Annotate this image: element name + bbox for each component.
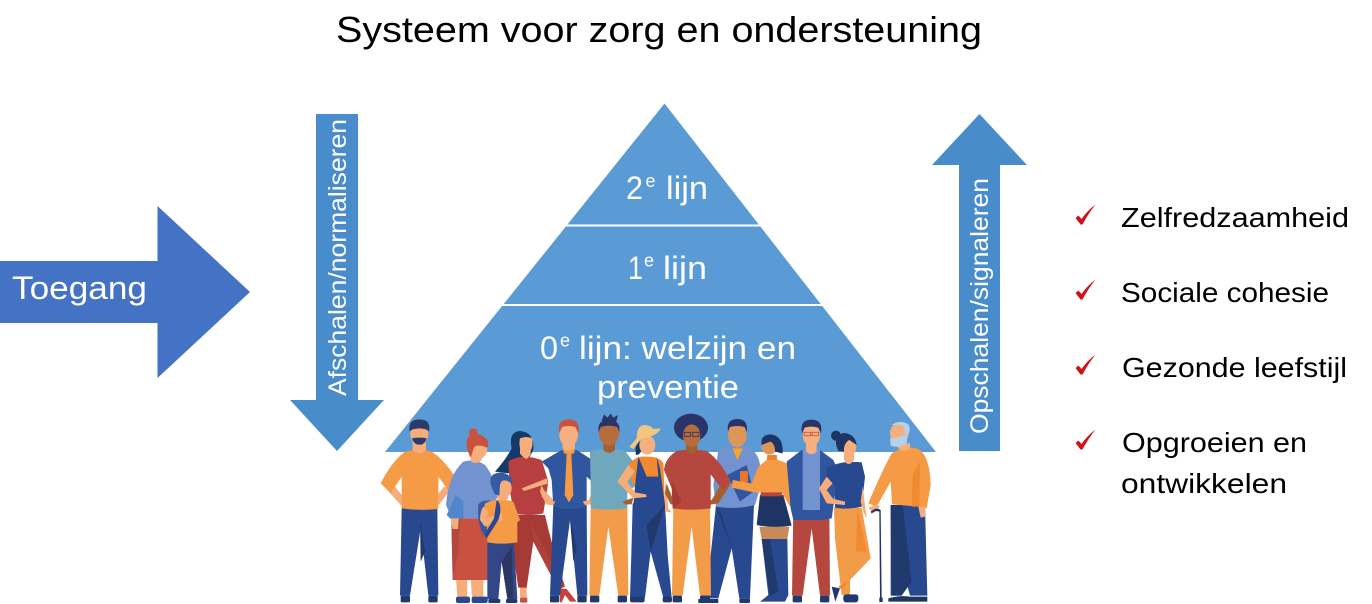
person: woman in overalls and straw hat: [617, 425, 672, 602]
tier label: 2e lijn: [626, 170, 708, 206]
item: Opgroeien en ontwikkelen: ontwikkelen: [1121, 468, 1287, 499]
item: Sociale cohesie: Sociale cohesie: [1121, 277, 1329, 308]
title: Systeem voor zorg en ondersteuning: [336, 9, 982, 50]
tier label: 1e lijn: 1: [628, 250, 643, 286]
person: man with afro in red sweater: [664, 414, 731, 602]
arrow: Opschalen/signaleren: Opschalen/signaleren: [966, 178, 994, 434]
item: Opgroeien en ontwikkelen: Opgroeien en: [1122, 427, 1307, 458]
checklist: [1076, 202, 1349, 499]
person: man in blue shirt and tie: [540, 419, 609, 602]
tier label: 2e lijn: 2: [626, 170, 643, 206]
person: man in teal shirt: [589, 414, 637, 602]
person: woman with dark hair in red top: [495, 431, 577, 603]
tier label: 1e lijn: lijn: [663, 250, 707, 286]
person: child with backpack: [478, 473, 520, 603]
item: Opgroeien en ontwikkelen: [1076, 427, 1307, 499]
arrow: Opschalen/signaleren: [932, 114, 1027, 451]
item: Zelfredzaamheid: Zelfredzaamheid: [1121, 202, 1349, 233]
tier label: 0e lijn: [540, 330, 796, 405]
illustration: group of people: [381, 414, 931, 603]
person: older man with cane: [868, 422, 931, 602]
item: Gezonde leefstijl: Gezonde leefstijl: [1122, 352, 1347, 383]
pyramid: [385, 104, 936, 452]
tier label: 2e lijn: e: [646, 171, 656, 191]
tier label: 0e lijn: preventie: [597, 369, 739, 405]
people left half: [381, 414, 672, 603]
tier label: 2e lijn: lijn: [666, 170, 708, 206]
arrow: Afschalen/normaliseren: Afschalen/normaliseren: [324, 119, 352, 396]
person: man with glasses and blue jacket: [787, 420, 838, 602]
tier label: 0e lijn: lijn: welzijn en: [579, 330, 796, 366]
person: man in light blue shirt: [698, 419, 760, 603]
person: woman with bun in blue top: [819, 431, 871, 602]
arrow: Toegang: Toegang: [12, 270, 147, 306]
person: bearded man in orange sweater: [381, 419, 459, 602]
person: woman in blue sweater and red skirt: [446, 428, 498, 603]
person: woman in orange top and skirt with stockings: [732, 434, 804, 602]
tier label: 1e lijn: e: [644, 250, 654, 270]
people right half: [664, 414, 931, 603]
tier label: 1e lijn: [628, 250, 707, 286]
arrow: Afschalen/normaliseren: [290, 114, 384, 451]
arrow: Toegang: [0, 206, 250, 378]
tier label: 0e lijn: e: [560, 330, 570, 350]
tier label: 0e lijn: 0: [540, 330, 558, 366]
